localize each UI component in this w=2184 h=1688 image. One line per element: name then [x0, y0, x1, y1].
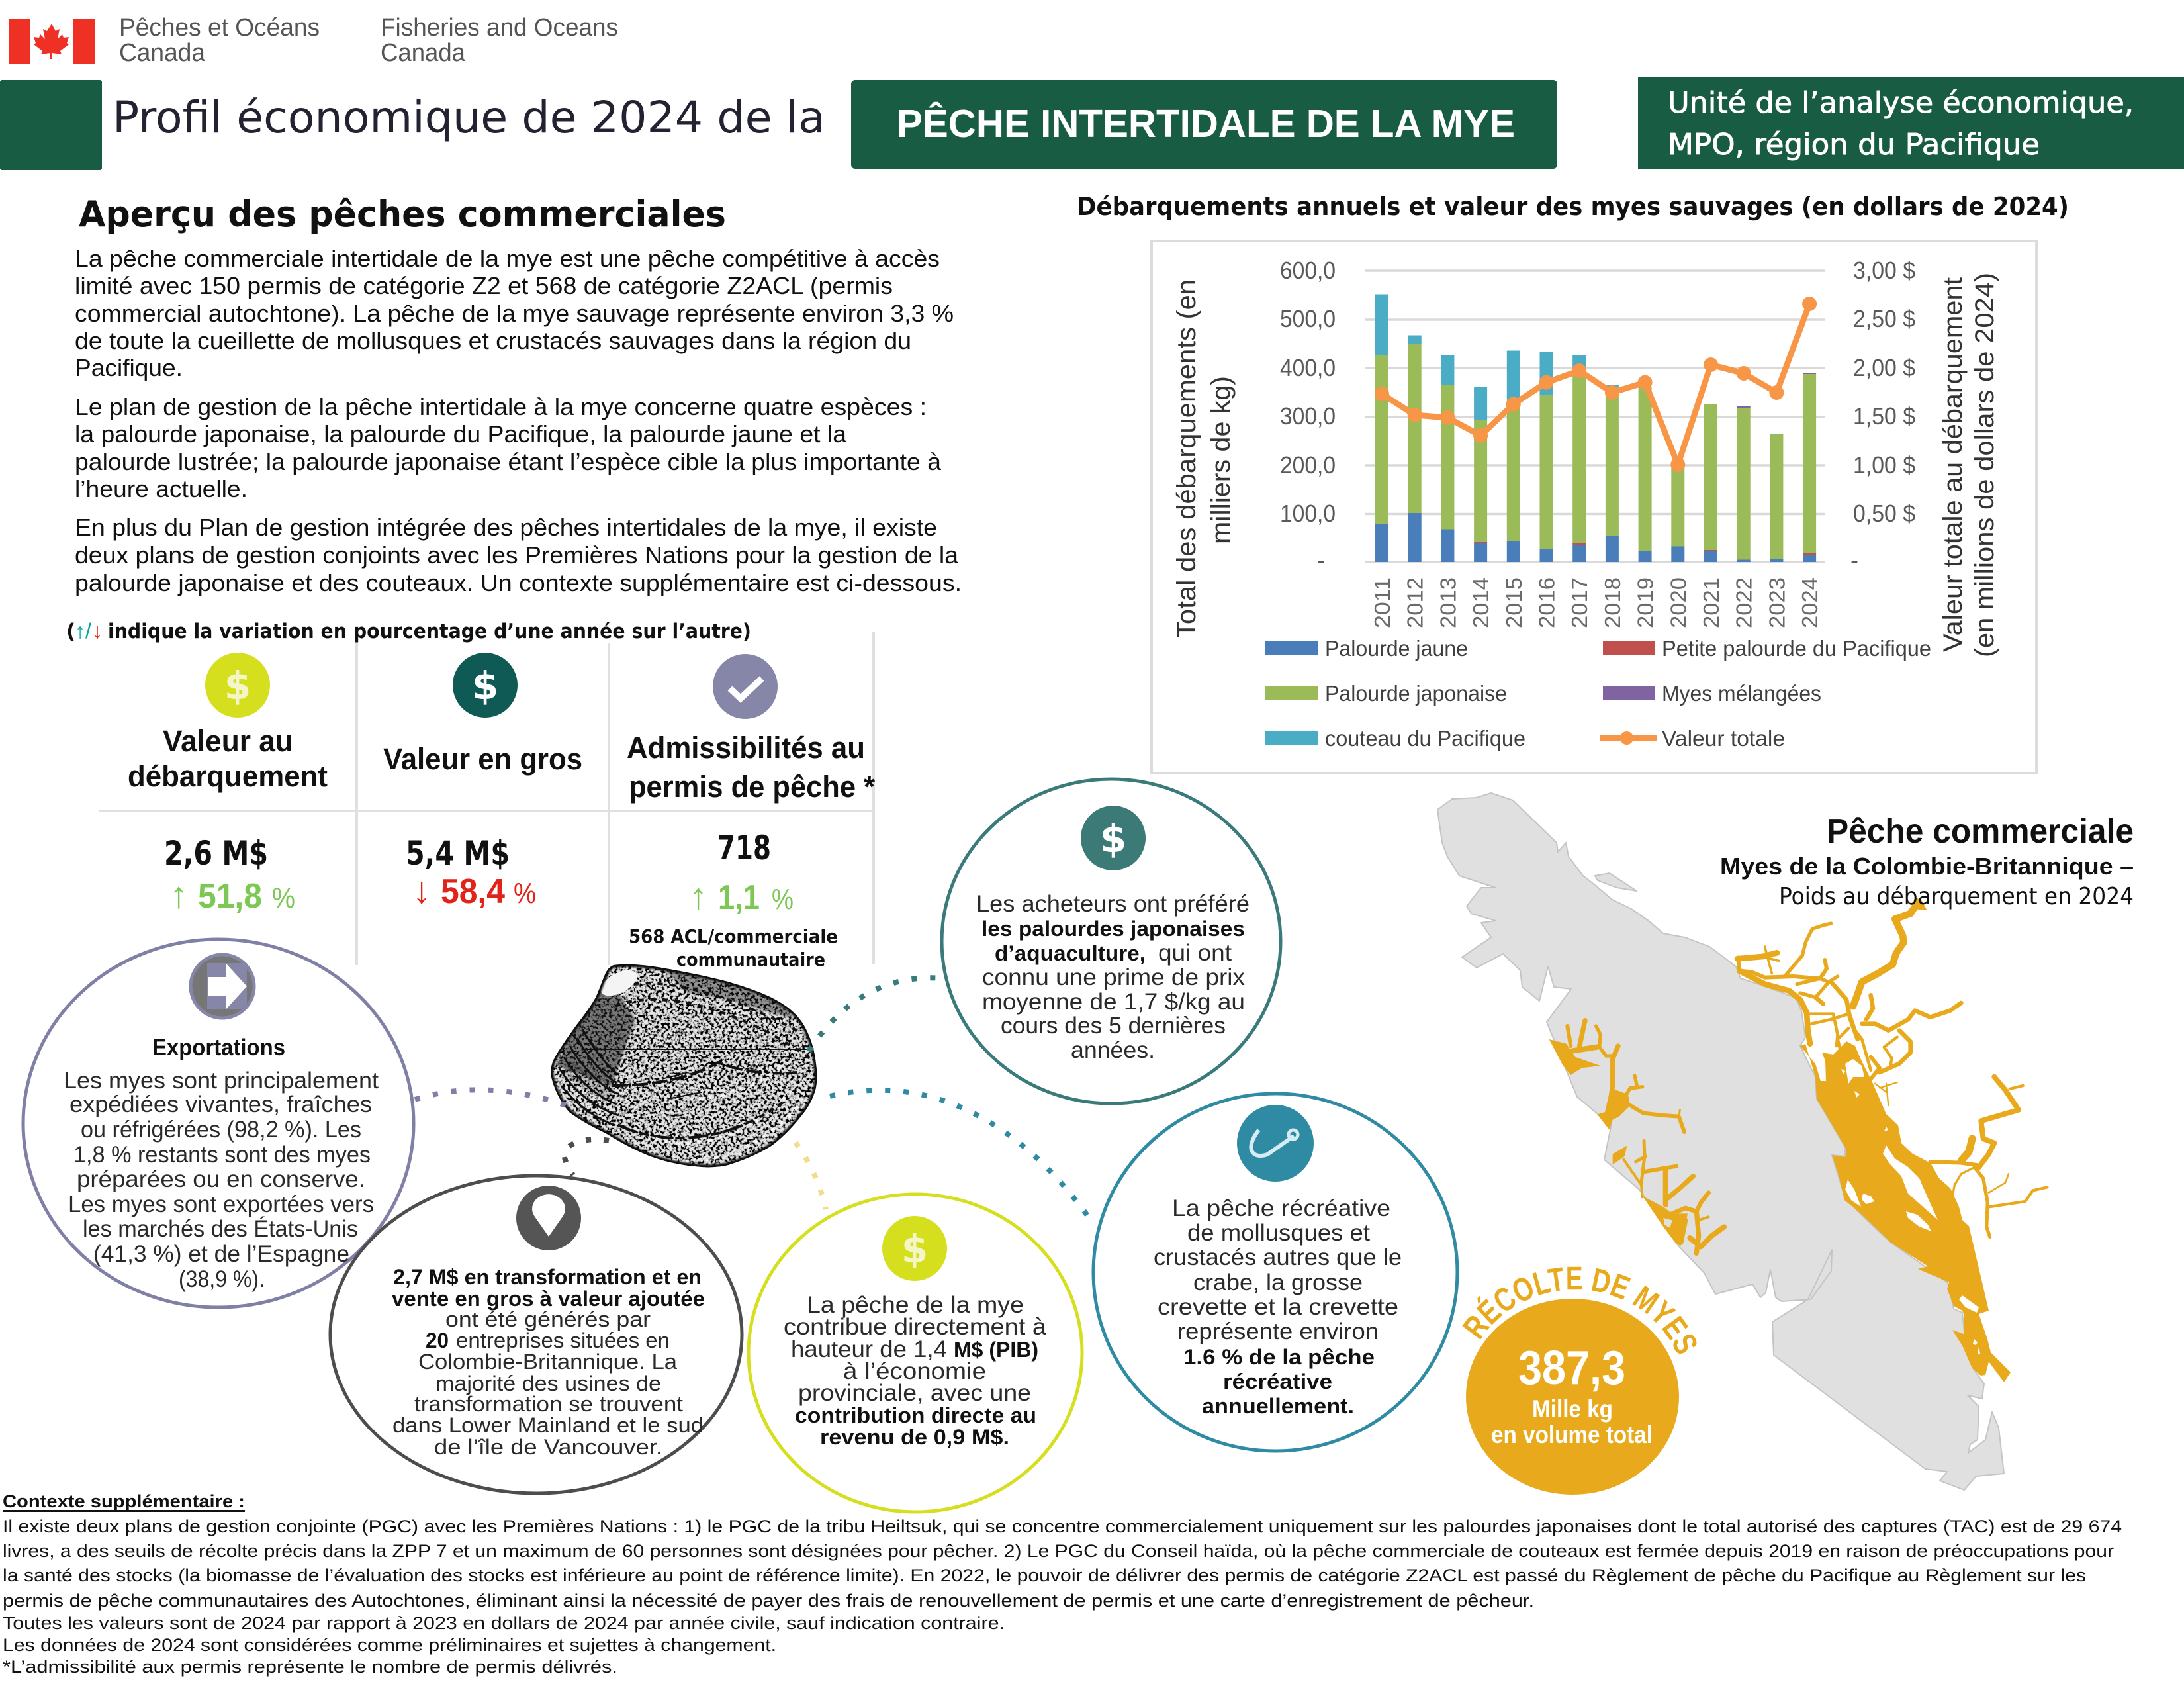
left axis labels: 200,0 [1280, 451, 1336, 479]
panel: aquaculture buyers bubble: cours des 5 dernières [1001, 1013, 1226, 1039]
panel: aquaculture buyers bubble: Les acheteurs ont préféré [976, 891, 1250, 917]
panel: recreational fishery bubble: 1.6 % de la pêche [1183, 1345, 1375, 1369]
logo: Government of Canada signature [9, 14, 618, 67]
x axis year labels: 2016 [1534, 577, 1559, 628]
panel: exports bubble: Les myes sont exportées vers [68, 1192, 374, 1217]
panel: licence eligibility: 1,1 [718, 878, 760, 917]
left axis title: milliers de kg) [1206, 376, 1236, 544]
panel: processing bubble: 20 [426, 1329, 449, 1352]
chart: landings and value [1152, 241, 2036, 773]
legend: Valeur totale [1662, 726, 1785, 751]
panel: wholesale value: Valeur en gros [383, 742, 582, 776]
panel: GDP contribution bubble: M$ (PIB) [954, 1338, 1038, 1362]
shell: white growth rings [655, 1066, 804, 1161]
legend [1265, 636, 1931, 751]
x axis year labels: 2021 [1699, 577, 1723, 628]
connector: purple dotted arc to clam [415, 1090, 579, 1110]
panel: processing bubble: vente en gros à valeur ajoutée [392, 1287, 705, 1311]
panel: landed value: 2,6 M$ [164, 834, 268, 872]
panel: licence eligibility: permis de pêche * [629, 770, 875, 804]
map title: Poids au débarquement en 2024 [1779, 883, 2134, 910]
panel: wholesale value: ↓ [412, 869, 431, 911]
panel: processing bubble: dans Lower Mainland et le sud [392, 1413, 704, 1437]
panel: wholesale value: 5,4 M$ [406, 834, 510, 872]
map: Strait of Georgia harvest area [1800, 1041, 2011, 1382]
footnotes: additional context: Il existe deux plans de gestion conjointe (PGC) avec les Premières Nations : 1) le PGC de la tribu Heiltsuk, qui se concentre commercialement uniquement sur les palourdes japonaises dont le total autorisé des captures (TAC) est de 29 674 [3, 1517, 2122, 1536]
panel: GDP contribution bubble: contribue directement à [784, 1314, 1047, 1340]
text block: overview paragraphs: La pêche commerciale intertidale de la mye est une pêche compétitive à accès [75, 245, 940, 272]
icon: fish hook [1237, 1105, 1314, 1182]
right axis labels [1850, 257, 1915, 573]
right axis labels: 1,50 $ [1853, 402, 1915, 430]
panel: exports bubble: (41,3 %) et de l’Espagne [93, 1241, 349, 1267]
left axis labels: 100,0 [1280, 500, 1336, 527]
legend: Palourde jaune [1325, 636, 1468, 661]
footnotes: additional context: Toutes les valeurs sont de 2024 par rapport à 2023 en dollars de 2024 par année civile, sauf indication contraire. [3, 1613, 1005, 1633]
panel: exports bubble [23, 939, 414, 1307]
panel: exports bubble: Exportations [152, 1035, 285, 1060]
panel: exports bubble: 1,8 % restants sont des myes [73, 1142, 371, 1168]
shell: dark shaded shoulder [556, 968, 794, 1099]
heading: chart title: Débarquements annuels et valeur des myes sauvages (en dollars de 2024) [1077, 192, 2069, 221]
note: arrows legend: ↓ [92, 619, 103, 643]
panel: aquaculture buyers bubble: connu une prime de prix [982, 964, 1246, 990]
callout: clam harvest total: Mille kg [1532, 1395, 1613, 1423]
map title: Myes de la Colombie-Britannique – [1720, 853, 2134, 880]
icon: export arrow [191, 955, 254, 1018]
right axis labels: 1,00 $ [1853, 451, 1915, 479]
panel: recreational fishery bubble: crabe, la grosse [1193, 1270, 1363, 1295]
shell: dark outline [551, 964, 817, 1167]
panel: licence eligibility: communautaire [676, 949, 825, 970]
bars: yellow clam [1375, 513, 1816, 562]
panel: landed value: débarquement [128, 759, 328, 793]
left axis labels: 500,0 [1280, 305, 1336, 332]
text block: overview paragraphs: palourde japonaise et des couteaux. Un contexte supplémentaire est ci-dessous. [75, 569, 962, 596]
panel: processing bubble: Colombie-Britannique. La [418, 1350, 677, 1374]
logo: Government of Canada signature: Canada [381, 39, 466, 67]
map: mainland inlets [1737, 897, 2047, 1237]
panel: exports bubble: préparées ou en conserve. [77, 1166, 365, 1192]
icon: dark teal dollar [453, 653, 518, 718]
footnotes: additional context: livres, a des seuils de récolte précis dans la ZPP 7 et un maximum de 60 personnes sont désignées pour pêcher. 2) Le PGC du Conseil haïda, où la pêche commerciale de couteaux est fermée depuis 2019 en raison de préoccupations pour [3, 1541, 2114, 1561]
x axis year labels [1370, 577, 1822, 628]
icon: dark teal dollar: $ [472, 663, 498, 708]
panel: exports bubble: expédiées vivantes, fraîches [69, 1092, 372, 1117]
callout: clam harvest total: RÉCOLTE DE MYES [1462, 1267, 1697, 1354]
panel: recreational fishery bubble: La pêche récréative [1172, 1196, 1390, 1221]
footnotes: additional context: permis de pêche communautaires des Autochtones, éliminant ainsi la nécessité de payer des frais de renouvellement de permis et une carte d’enregistrement de pêcheur. [3, 1591, 1534, 1611]
text block: overview paragraphs: de toute la cueillette de mollusques et crustacés sauvages dans la région du [75, 327, 911, 354]
panel: processing bubble: de l’île de Vancouver. [434, 1435, 662, 1459]
panel: wholesale value: % [514, 877, 536, 910]
bars: Japanese clam [1375, 344, 1816, 560]
header banner: economic analysis unit: MPO, région du Pacifique [1668, 128, 2040, 162]
icon: location pin [516, 1186, 581, 1250]
x axis year labels: 2018 [1600, 577, 1625, 628]
text block: overview paragraphs: Le plan de gestion de la pêche intertidale à la mye concerne quatre espèces : [75, 393, 927, 420]
x axis year labels: 2019 [1633, 577, 1658, 628]
text block: overview paragraphs: En plus du Plan de gestion intégrée des pêches intertidales de la mye, il existe [75, 514, 937, 541]
header banner: fishery name [851, 80, 1557, 169]
panel: exports bubble: ou réfrigérées (98,2 %). Les [81, 1117, 361, 1143]
panel: GDP contribution bubble: hauteur de 1,4 [791, 1336, 947, 1362]
panel: exports bubble: Les myes sont principalement [64, 1068, 379, 1094]
text block: overview paragraphs: commercial autochtone). La pêche de la mye sauvage représente environ 3,3 % [75, 300, 954, 327]
panel: aquaculture buyers bubble: les palourdes japonaises [981, 917, 1245, 941]
panel: recreational fishery bubble [1093, 1094, 1457, 1451]
connector: blue dotted arc [830, 1090, 1092, 1222]
map: Vancouver Island and harvest areas [1437, 793, 2047, 1490]
icon: purple check [713, 654, 778, 719]
panel: recreational fishery bubble: représente environ [1177, 1319, 1379, 1344]
footnotes: additional context: la santé des stocks (la biomasse de l’évaluation des stocks est inférieure au point de référence limite). En 2022, le pouvoir de délivrer des permis de catégorie Z2ACL est passé du Règlement de pêche du Pacifique au Règlement sur les [3, 1566, 2086, 1585]
panel: GDP contribution bubble: provinciale, avec une [798, 1380, 1031, 1406]
icon: yellow dollar [205, 653, 270, 718]
x axis year labels: 2013 [1435, 577, 1460, 628]
right axis labels: 2,50 $ [1853, 305, 1915, 332]
panel: aquaculture buyers bubble [942, 779, 1281, 1103]
right axis labels: 0,50 $ [1853, 500, 1915, 527]
panel: GDP contribution bubble [749, 1194, 1082, 1512]
bars: razor clam [1375, 294, 1619, 420]
panel: GDP contribution bubble: contribution directe au [795, 1403, 1036, 1427]
icon: Canadian flag [9, 19, 95, 64]
panel: exports bubble: (38,9 %). [179, 1266, 265, 1292]
icon: teal dollar [1081, 806, 1146, 870]
panel: landed value: Valeur au [163, 724, 293, 758]
footnotes: additional context [3, 1491, 2122, 1677]
panel: processing bubble: entreprises situées en [456, 1329, 670, 1352]
text block: overview paragraphs: palourde lustrée; la palourde japonaise étant l’espèce cible la plus importante à [75, 448, 942, 475]
right axis labels: 2,00 $ [1853, 354, 1915, 381]
panel: licence eligibility: % [772, 883, 794, 915]
legend: Myes mélangées [1662, 681, 1821, 706]
header band: left green block [0, 80, 102, 170]
panel: recreational fishery bubble: de mollusques et [1187, 1220, 1370, 1246]
panel: aquaculture buyers bubble: qui ont [1158, 940, 1232, 966]
panel: licence eligibility: 718 [717, 829, 771, 867]
right axis title [1938, 273, 1999, 657]
x axis year labels: 2011 [1370, 577, 1394, 628]
x axis year labels: 2014 [1469, 577, 1493, 628]
callout: clam harvest total: 387,3 [1518, 1342, 1625, 1395]
panel: recreational fishery bubble: récréative [1223, 1370, 1332, 1393]
icon: yellow dollar [882, 1216, 947, 1281]
connector: dark dotted arc from clam [565, 1139, 609, 1175]
text block: overview paragraphs: limité avec 150 permis de catégorie Z2 et 568 de catégorie Z2ACL (permis [75, 272, 893, 299]
x axis year labels: 2015 [1502, 577, 1526, 628]
connector: teal dotted arc [809, 978, 944, 1051]
icon: yellow dollar: $ [224, 663, 251, 708]
left axis title: Total des débarquements (en [1172, 279, 1201, 638]
footnotes: additional context: *L’admissibilité aux permis représente le nombre de permis délivrés. [3, 1657, 617, 1677]
text block: overview paragraphs: deux plans de gestion conjoints avec les Premières Nations pour la gestion de la [75, 541, 959, 569]
panel: GDP contribution bubble: à l’économie [843, 1358, 986, 1384]
header banner: fishery name: PÊCHE INTERTIDALE DE LA MYE [897, 101, 1515, 146]
left axis labels: - [1317, 546, 1325, 573]
line: total value [1375, 297, 1817, 472]
text block: overview paragraphs: l’heure actuelle. [75, 475, 248, 502]
panel: recreational fishery bubble: annuellement. [1202, 1394, 1354, 1418]
panel: recreational fishery bubble: crustacés autres que le [1154, 1244, 1402, 1270]
logo: Government of Canada signature: Canada [119, 39, 206, 67]
note: arrows legend: ↑/ [75, 619, 91, 643]
icon: yellow dollar: $ [901, 1227, 928, 1272]
map title [1720, 812, 2134, 910]
panel: landed value: % [272, 882, 295, 914]
panel: licence eligibility: ↑ [689, 875, 707, 917]
map title: Pêche commerciale [1827, 812, 2134, 851]
panel: landed value [128, 653, 328, 915]
callout: clam harvest total: en volume total [1491, 1421, 1653, 1448]
footnotes: additional context: Les données de 2024 sont considérées comme préliminaires et sujettes à changement. [3, 1635, 776, 1655]
header banner: economic analysis unit: Unité de l’analyse économique, [1668, 86, 2134, 120]
panel: landed value: 51,8 [198, 877, 262, 915]
text block: overview paragraphs: la palourde japonaise, la palourde du Pacifique, la palourde jaune et la [75, 420, 847, 447]
panel: GDP contribution bubble: La pêche de la mye [807, 1292, 1024, 1318]
legend: Palourde japonaise [1325, 681, 1507, 706]
callout: clam harvest total [1462, 1267, 1697, 1495]
text block: overview paragraphs: Pacifique. [75, 354, 183, 381]
note: arrows legend: ( [66, 620, 75, 643]
logo: Government of Canada signature: Fisheries and Oceans [381, 14, 618, 42]
connector: yellow dotted arc [796, 1143, 826, 1209]
panel: landed value: ↑ [169, 874, 188, 915]
x axis year labels: 2012 [1403, 577, 1428, 628]
panel: aquaculture buyers bubble: années. [1071, 1037, 1155, 1063]
panel: exports bubble: les marchés des États-Unis [83, 1216, 358, 1242]
panel: GDP contribution bubble: revenu de 0,9 M$. [820, 1425, 1009, 1449]
panel: processing bubble: ont été générés par [445, 1307, 651, 1331]
bars: small Pacific clam [1474, 542, 1816, 555]
panel: processing bubble [330, 1176, 742, 1493]
icon: teal dollar: $ [1100, 816, 1126, 861]
table grid lines [99, 632, 874, 965]
text block: overview paragraphs [75, 245, 962, 596]
left axis labels [1280, 257, 1336, 573]
panel: licence eligibility: Admissibilités au [627, 731, 865, 765]
panel: processing bubble: majorité des usines de [435, 1372, 661, 1395]
right axis title: (en millions de dollars de 2024) [1970, 273, 1999, 657]
x axis year labels: 2020 [1666, 577, 1690, 628]
left axis title [1172, 279, 1236, 638]
panel: aquaculture buyers bubble: moyenne de 1,7 $/kg au [982, 989, 1245, 1015]
panel: wholesale value: 58,4 [441, 872, 505, 911]
right axis title: Valeur totale au débarquement [1938, 277, 1968, 652]
bars: mixed clams [1737, 373, 1816, 408]
header banner: economic analysis unit [1638, 77, 2184, 169]
legend: Petite palourde du Pacifique [1662, 636, 1931, 661]
illustration: clam shell [546, 960, 824, 1172]
x axis year labels: 2023 [1764, 577, 1789, 628]
panel: recreational fishery bubble: crevette et la crevette [1158, 1294, 1398, 1320]
right axis labels: 3,00 $ [1853, 257, 1915, 284]
panel: processing bubble: 2,7 M$ en transformation et en [393, 1265, 702, 1289]
note: arrows legend: indique la variation en pourcentage d’une année sur l’autre) [108, 620, 751, 643]
left axis labels: 600,0 [1280, 257, 1336, 284]
left axis labels: 300,0 [1280, 402, 1336, 430]
logo: Government of Canada signature: Pêches et Océans [119, 14, 320, 42]
right axis labels: - [1850, 546, 1858, 573]
panel: processing bubble: transformation se trouvent [414, 1392, 683, 1416]
title: Profil économique de 2024 de la [113, 92, 825, 143]
panel: aquaculture buyers bubble: d’aquaculture, [995, 941, 1146, 965]
panel: wholesale value [383, 653, 582, 911]
x axis year labels: 2017 [1567, 577, 1592, 628]
map: land mass [1437, 793, 2004, 1490]
x axis year labels: 2024 [1797, 577, 1822, 628]
panel: licence eligibility: 568 ACL/commerciale [629, 925, 838, 947]
left axis labels: 400,0 [1280, 354, 1336, 381]
panel: licence eligibility [627, 654, 875, 970]
footnotes: additional context: Contexte supplémentaire : [3, 1491, 245, 1511]
x axis year labels: 2022 [1732, 577, 1756, 628]
map: west coast inlets [1549, 1021, 1724, 1253]
legend: couteau du Pacifique [1325, 726, 1525, 751]
heading: commercial fisheries overview: Aperçu des pêches commerciales [79, 193, 726, 235]
